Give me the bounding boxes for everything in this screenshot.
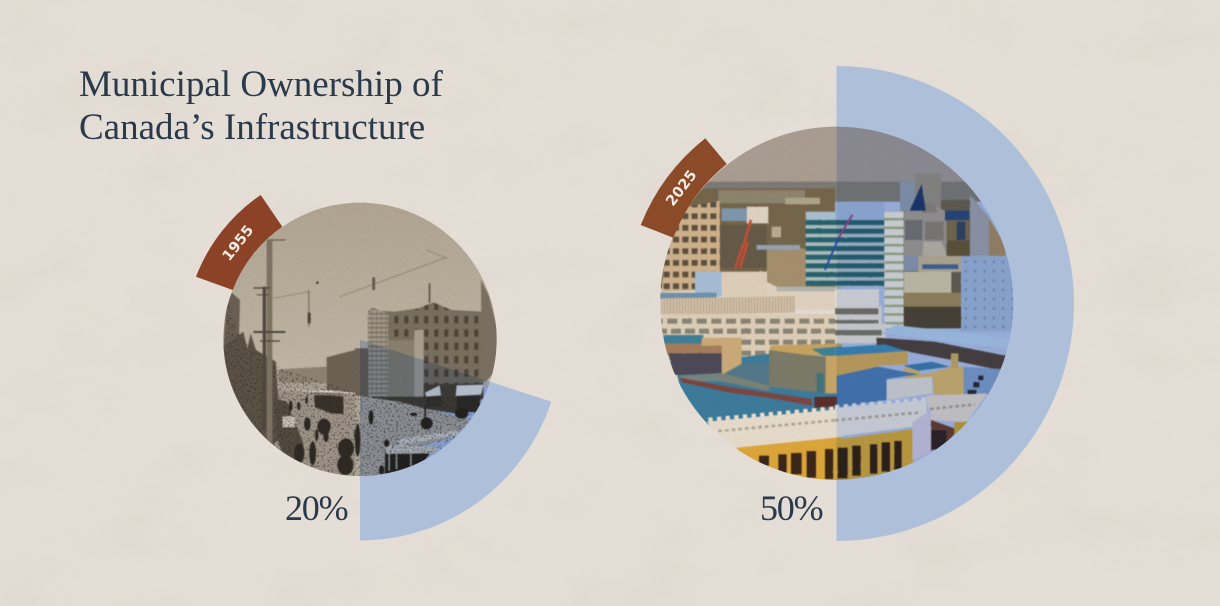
centre tram — [314, 394, 343, 414]
trees — [904, 293, 961, 308]
title: Municipal Ownership of — [79, 64, 443, 105]
figures — [289, 396, 359, 475]
office tower — [806, 212, 842, 220]
low legislature wing — [904, 256, 919, 271]
tan strip — [770, 343, 842, 358]
lower right quadrant — [833, 323, 1012, 482]
tree canopy — [655, 188, 842, 288]
wedge overlay on photo — [360, 340, 490, 476]
figures — [355, 407, 468, 475]
wedge overlay on photo — [836, 66, 1074, 541]
wedge: 50% share — [836, 66, 1074, 541]
tan block — [835, 351, 908, 393]
far right buildings — [326, 350, 356, 394]
lower left quadrant — [655, 325, 842, 488]
left half of street — [223, 293, 363, 483]
left crowd — [277, 399, 304, 460]
tab: 1955 — [196, 195, 282, 290]
photo grain on street — [223, 304, 484, 476]
utility poles and wires — [253, 239, 447, 443]
wedge: 20% share — [360, 340, 551, 540]
tab: 2025 — [641, 138, 727, 238]
right cornice — [926, 393, 988, 422]
awnings — [456, 385, 484, 396]
hotel windows — [661, 314, 841, 331]
photo: modern skyline — [655, 123, 1022, 488]
right bay — [931, 420, 954, 451]
tan tower — [662, 201, 720, 292]
red parapet — [680, 378, 812, 406]
right high-rise — [970, 195, 989, 256]
sky — [220, 200, 500, 387]
upper left quadrant — [655, 182, 842, 331]
teal roof — [663, 335, 703, 345]
right half of street — [355, 280, 498, 483]
value: 20%: 20% — [285, 488, 348, 528]
brown building — [665, 343, 722, 355]
legislature — [904, 206, 947, 257]
title: Canada’s Infrastructure — [79, 107, 425, 148]
middle bay — [388, 340, 418, 397]
sky — [707, 126, 837, 184]
yellow block — [903, 367, 964, 396]
roof block — [695, 272, 722, 297]
office tower — [835, 202, 884, 220]
blue crane — [825, 215, 852, 270]
mid roof — [722, 363, 769, 388]
panel: 2025 chart — [641, 66, 1074, 541]
hotel lower floors — [655, 325, 842, 363]
facade windows — [838, 441, 902, 478]
base roof — [675, 345, 842, 425]
white box — [887, 377, 933, 400]
road — [272, 390, 356, 476]
left tower — [223, 293, 240, 350]
left trees and buildings — [223, 332, 281, 447]
tab: 2025: 2025 — [663, 168, 701, 209]
hotel — [835, 323, 886, 343]
white carriage — [282, 416, 295, 427]
red crane — [735, 220, 751, 268]
dark parapet — [877, 338, 1006, 371]
ground floor shadow — [368, 383, 483, 413]
blue roof — [960, 367, 1002, 397]
distance — [835, 182, 1022, 202]
distant towers — [900, 182, 916, 211]
hotel end — [835, 289, 879, 307]
facade windows — [759, 448, 842, 479]
tan box — [702, 338, 742, 375]
tab: 1955: 1955 — [220, 223, 257, 264]
pillar — [912, 410, 931, 461]
foreground tram — [385, 430, 459, 474]
far left buildings — [355, 348, 368, 398]
cornice — [707, 409, 842, 448]
grey brick block — [769, 350, 826, 393]
value: 50%: 50% — [760, 488, 823, 528]
dark buildings — [945, 211, 969, 221]
blue strip — [660, 293, 717, 299]
photo: historic street scene — [220, 200, 500, 483]
yellow facade — [737, 437, 842, 488]
distant buildings — [278, 366, 327, 384]
blue box — [837, 367, 918, 408]
pale roof — [882, 325, 1012, 349]
blue-clad building — [961, 256, 1013, 331]
panel: 1955 chart — [196, 195, 551, 540]
ribbed band — [661, 296, 795, 315]
road — [355, 395, 470, 483]
main block — [368, 302, 483, 398]
small distant buildings — [747, 207, 768, 223]
main cornice — [835, 400, 927, 437]
yellow facade — [833, 429, 913, 482]
dome — [922, 201, 938, 213]
left bay — [368, 307, 388, 397]
upper right quadrant — [825, 173, 1022, 331]
green-grey wall — [720, 373, 769, 391]
roof vents — [968, 376, 983, 395]
horizon — [702, 180, 836, 190]
right tower — [481, 280, 498, 382]
